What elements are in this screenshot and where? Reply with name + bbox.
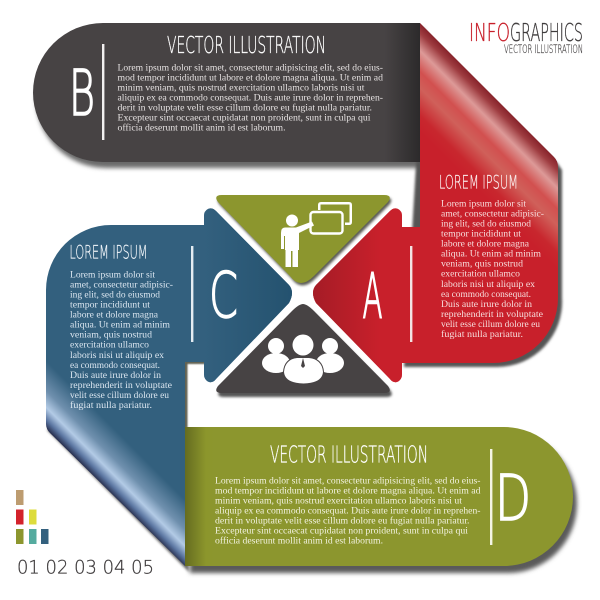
blue panel body text: tempor incididunt ut [70,300,150,311]
letter C: C [209,259,238,332]
panel: dark triangle with team [216,304,392,397]
panel: red ribbon A [313,23,558,382]
red panel body text: amet, consectetur adipisic- [441,208,544,220]
panel: blue ribbon C [46,208,292,566]
dark panel body text: Excepteur sint occaecat cupidatat non proident, sunt in culpa qui [118,113,371,124]
red panel body text: Duis aute irure dolor in [441,299,532,310]
legend: colour swatches [16,490,48,544]
green panel body text: Lorem ipsum dolor sit amet, consectetur adipisicing elit, sed do eius- [215,476,480,486]
dark panel body text: Lorem ipsum dolor sit amet, consectetur adipisicing elit, sed do eius- [118,62,383,74]
red panel heading: LOREM IPSUM [439,172,518,194]
red panel body text: labore et dolore magna [441,239,530,250]
icon: team of three people [262,334,344,384]
dark panel body text [118,62,383,134]
red panel body text: veniam, quis nostrud [441,259,523,270]
panel: red ribbon A: A [362,260,382,333]
blue panel body text: veniam, quis nostrud [70,330,152,341]
red panel body text: Lorem ipsum dolor sit [441,198,526,210]
red panel body text [441,198,544,340]
dark panel body text: minim veniam, quis nostrud exercitation ullamco laboris nisi ut [118,82,365,94]
red panel body text: velit esse cillum dolore eu [441,319,540,330]
letter B: B [69,57,95,130]
dark divider [102,44,104,140]
blue panel body text: exercitation ullamco [70,340,149,351]
green panel body text [215,476,481,547]
red panel body text: aliqua. Ut enim ad minim [441,249,542,260]
green panel body text: minim veniam, quis nostrud exercitation ullamco laboris nisi ut [215,496,462,506]
title: INFOGRAPHICS: INFO [469,18,510,47]
red panel body text: tempor incididunt ut [441,229,521,240]
title: INFOGRAPHICS [469,18,583,56]
red panel body text: reprehenderit in voluptate [441,309,543,320]
blue panel body text: velit esse cillum dolore eu [70,390,169,401]
blue panel heading: LOREM IPSUM [70,242,148,264]
blue panel body text: Lorem ipsum dolor sit [70,270,155,280]
dark panel heading: VECTOR ILLUSTRATION [167,31,326,59]
red divider [410,246,412,342]
green panel heading: VECTOR ILLUSTRATION [270,440,428,468]
blue panel body text: ing elit, sed do eiusmod [70,290,160,300]
green divider [490,449,492,545]
red panel body text: fugiat nulla pariatur. [441,329,523,340]
icon: presenter with screens [281,202,352,267]
panel: green triangle with presenter [216,195,391,286]
blue panel body text: amet, consectetur adipisic- [70,280,173,290]
green panel body text: officia deserunt mollit anim id est laborum. [215,536,383,547]
blue panel body text: reprehenderit in voluptate [70,380,172,391]
blue panel body text: fugiat nulla pariatur. [70,400,152,411]
red panel body text: ing elit, sed do eiusmod [441,218,531,230]
red panel body text: exercitation ullamco [441,269,520,280]
blue panel body text: labore et dolore magna [70,310,159,321]
dark panel body text: mod tempor incididunt ut labore et dolore magna aliqua. Ut enim ad [118,72,383,84]
blue panel body text: ea commodo consequat. [70,360,160,371]
letter D: D [495,462,531,535]
green panel body text: mod tempor incididunt ut labore et dolore magna aliqua. Ut enim ad [215,486,481,496]
red panel body text: laboris nisi ut aliquip ex [441,279,535,290]
blue panel body text [70,270,173,411]
panel: green ribbon D [185,427,573,566]
green panel body text: aliquip ex ea commodo consequat. Duis aute irure dolor in reprehen- [215,506,480,517]
dark panel body text: derit in voluptate velit esse cillum dolore eu fugiat nulla pariatur. [118,103,372,114]
panel: dark ribbon B [33,23,420,162]
green panel body text: Excepteur sint occaecat cupidatat non proident, sunt in culpa qui [215,526,468,537]
legend: numbers: 01 02 03 04 05 [17,556,154,578]
red panel body text: ea commodo consequat. [441,289,531,300]
dark panel body text: officia deserunt mollit anim id est laborum. [118,123,286,134]
blue panel body text: laboris nisi ut aliquip ex [70,350,164,361]
blue panel body text: aliqua. Ut enim ad minim [70,320,171,331]
dark panel body text: aliquip ex ea commodo consequat. Duis aute irure dolor in reprehen- [118,93,383,104]
blue divider [191,246,193,342]
green panel body text: derit in voluptate velit esse cillum dolore eu fugiat nulla pariatur. [215,516,470,527]
blue panel body text: Duis aute irure dolor in [70,370,161,381]
